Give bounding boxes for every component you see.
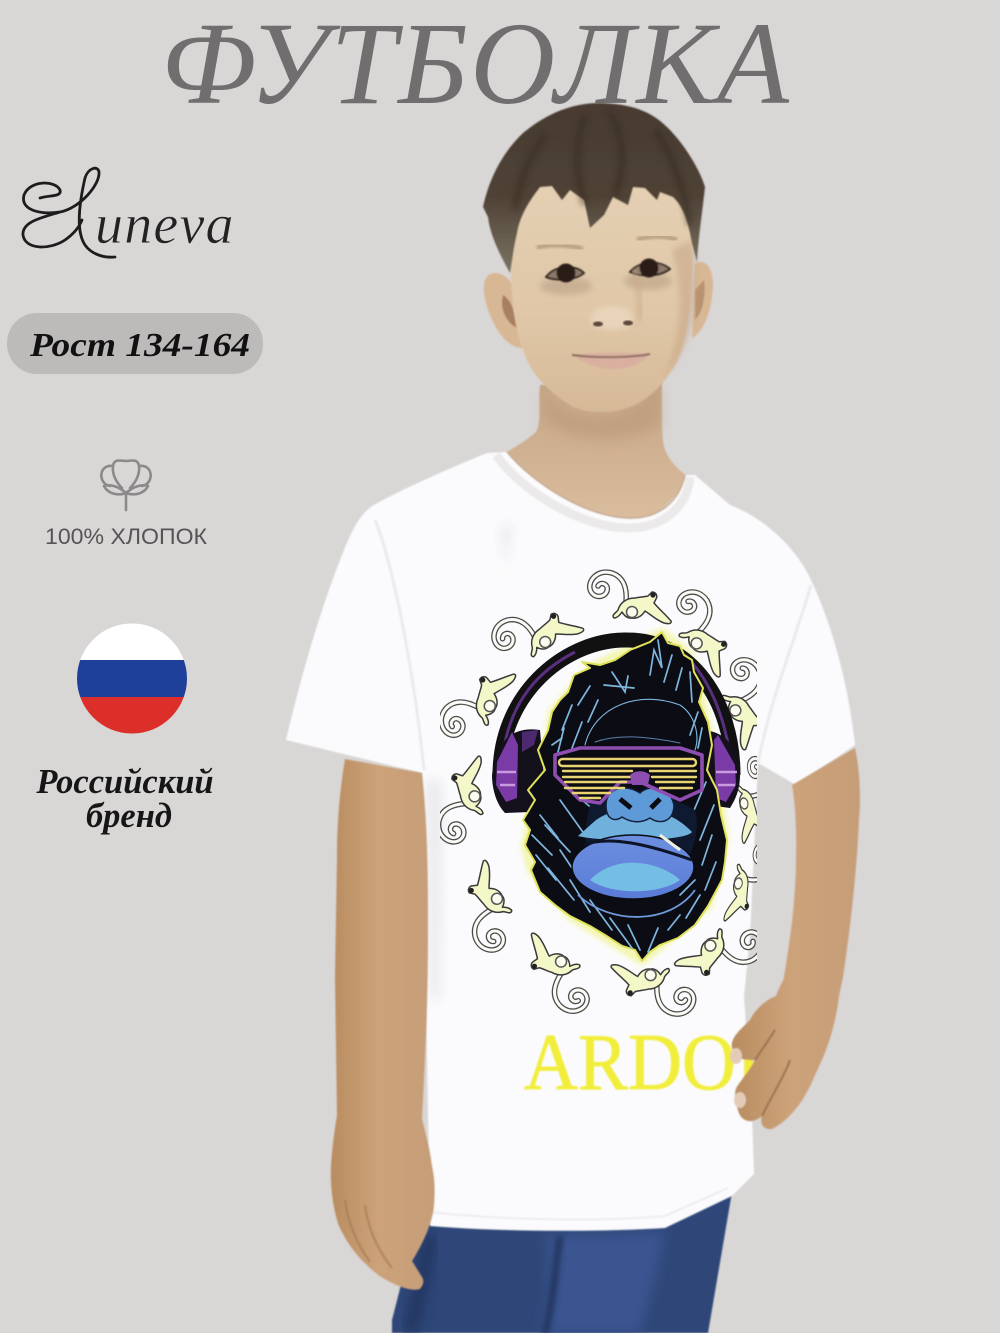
height pill: Рост 134-164 [29, 327, 250, 364]
eyebrows [537, 245, 583, 249]
hair streaks [515, 112, 690, 225]
brand caption [35, 763, 214, 835]
face skin [511, 180, 693, 412]
monkeys ring [440, 569, 757, 1017]
yellow glow [525, 632, 725, 961]
head [483, 103, 705, 412]
neck [502, 380, 692, 530]
face shading [664, 240, 695, 375]
sleeve seams [375, 520, 424, 770]
cotton label: 100% ХЛОПОК [45, 524, 207, 549]
headphones [492, 640, 740, 813]
icon: cotton boll [101, 460, 151, 510]
brand caption: Российский [35, 763, 214, 801]
neck shadow [545, 385, 660, 439]
muzzle [586, 800, 697, 854]
hair [483, 103, 705, 273]
fur strokes [532, 640, 716, 952]
icon: Russian flag [77, 623, 187, 734]
left arm [331, 759, 435, 1290]
eye shadows [540, 277, 592, 295]
shirt wordmark: ARDOR [524, 1019, 787, 1107]
shutter glasses [555, 748, 702, 803]
lower lip [572, 835, 694, 899]
logo: Luneva: uneva [95, 194, 235, 256]
jeans [392, 1192, 732, 1333]
ears [484, 262, 713, 348]
nose [606, 788, 674, 822]
brand caption: бренд [86, 797, 172, 835]
chin arc [578, 890, 695, 917]
mouth [572, 353, 650, 369]
logo: Luneva [23, 168, 235, 257]
nose [590, 306, 634, 330]
right arm and hand [730, 748, 860, 1129]
gorilla print [440, 569, 757, 1017]
shirt collar [496, 455, 690, 528]
title: ФУТБОЛКА [161, 0, 790, 129]
photo: boy in t-shirt [286, 103, 860, 1333]
eyes [546, 258, 670, 282]
height pill [7, 313, 263, 374]
shirt shading [426, 780, 442, 1000]
gorilla head [523, 632, 727, 961]
t-shirt [286, 452, 855, 1231]
